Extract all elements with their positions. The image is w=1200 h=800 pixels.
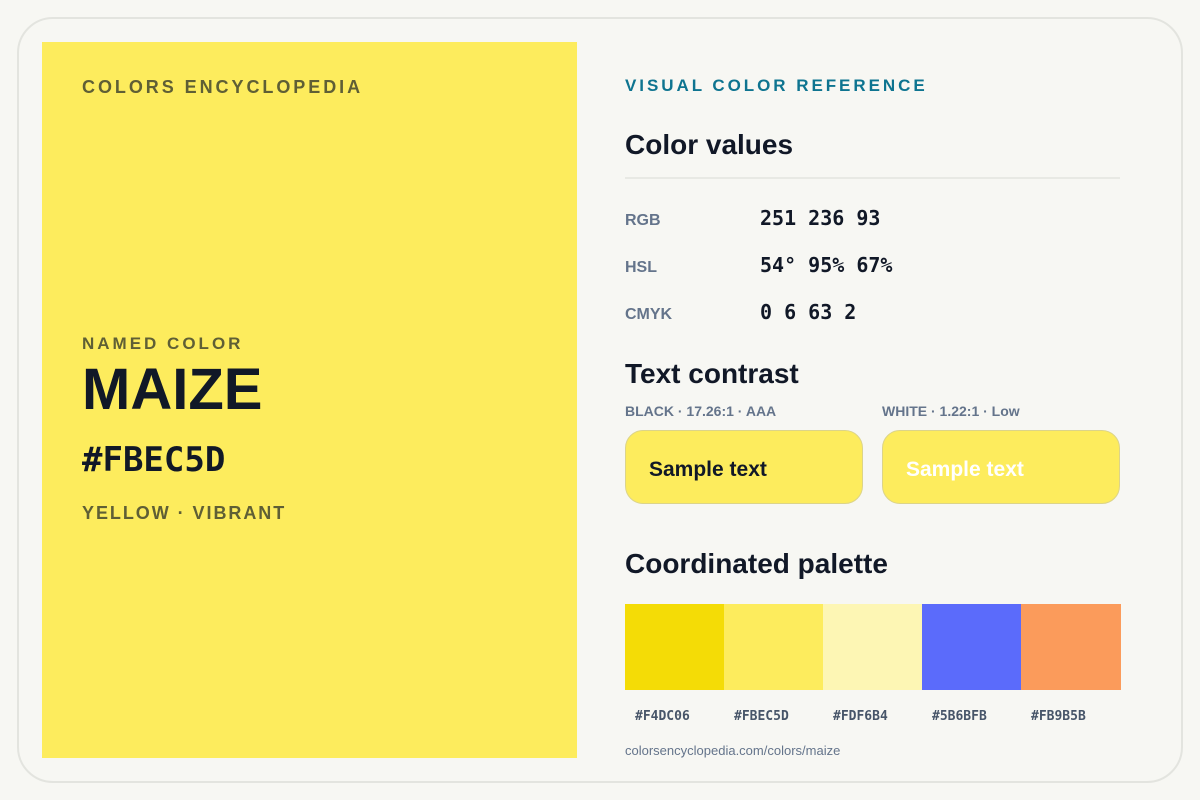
panel: color hero bbox=[42, 42, 577, 758]
CMYK label: CMYK bbox=[625, 306, 672, 323]
panel: reference details bbox=[625, 76, 1121, 758]
swatch: FBEC5D bbox=[724, 604, 823, 690]
hex label: F4DC06: #F4DC06 bbox=[635, 709, 690, 724]
hex label: 5B6BFB: #5B6BFB bbox=[932, 709, 987, 724]
label: black contrast: BLACK · 17.26:1 · AAA bbox=[625, 403, 776, 419]
sample: white text: Sample text bbox=[906, 458, 1024, 481]
HSL label: HSL bbox=[625, 259, 657, 276]
section eyebrow: VISUAL COLOR REFERENCE bbox=[625, 76, 928, 95]
HSL value: 54° 95% 67% bbox=[760, 253, 892, 277]
brand label: COLORS ENCYCLOPEDIA bbox=[82, 77, 363, 97]
RGB label: RGB bbox=[625, 212, 661, 229]
swatch: F4DC06 bbox=[625, 604, 724, 690]
sample: black text: Sample text bbox=[649, 458, 767, 481]
heading: coordinated palette: Coordinated palette bbox=[625, 548, 888, 579]
color family tags: YELLOW · VIBRANT bbox=[82, 503, 286, 523]
heading: text contrast: Text contrast bbox=[625, 358, 799, 389]
hex code: #FBEC5D bbox=[82, 440, 225, 480]
swatch: FB9B5B bbox=[1021, 604, 1121, 690]
swatch: 5B6BFB bbox=[922, 604, 1021, 690]
hex label: FBEC5D: #FBEC5D bbox=[734, 709, 789, 724]
hex label: FB9B5B: #FB9B5B bbox=[1031, 709, 1086, 724]
row: RGB bbox=[625, 206, 880, 230]
row: HSL bbox=[625, 253, 892, 277]
CMYK value: 0 6 63 2 bbox=[760, 300, 856, 324]
source URL: colorsencyclopedia.com/colors/maize bbox=[625, 743, 840, 758]
sample: black text bbox=[625, 430, 863, 504]
color name: MAIZE bbox=[82, 357, 262, 422]
heading: color values: Color values bbox=[625, 129, 793, 160]
palette strip bbox=[625, 604, 1121, 690]
swatch: FDF6B4 bbox=[823, 604, 922, 690]
RGB value: 251 236 93 bbox=[760, 206, 880, 230]
hex label: FDF6B4: #FDF6B4 bbox=[833, 709, 888, 724]
label: white contrast: WHITE · 1.22:1 · Low bbox=[882, 403, 1020, 419]
eyebrow: named color: NAMED COLOR bbox=[82, 334, 243, 353]
row: CMYK bbox=[625, 300, 856, 324]
sample: white text bbox=[882, 430, 1120, 504]
